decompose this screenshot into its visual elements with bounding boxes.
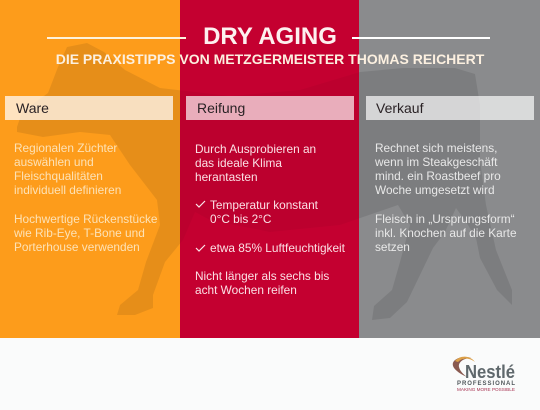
heading bar: Reifung: Reifung — [197, 100, 245, 116]
panel: Reifung background — [180, 0, 359, 338]
text: temperature: 0°C bis 2°C — [210, 212, 271, 226]
text: Reifung tip 1 — [195, 142, 316, 184]
text: humidity: etwa 85% Luftfeuchtigkeit — [210, 241, 345, 255]
title rule right — [352, 37, 490, 39]
text: temperature — [210, 198, 318, 226]
logo subtitle: PROFESSIONAL — [457, 381, 515, 387]
text: Ware tip 2: wie Rib-Eye, T-Bone und — [14, 226, 145, 240]
panel: Verkauf background — [359, 0, 540, 338]
text: Reifung tip 2: acht Wochen reifen — [195, 283, 297, 297]
text: Verkauf tip 1: Rechnet sich meistens, — [375, 141, 497, 155]
text: Ware tip 1: Regionalen Züchter — [14, 141, 117, 155]
panel: Ware background — [0, 0, 180, 338]
text: Verkauf tip 2 — [375, 212, 517, 254]
text: temperature: Temperatur konstant — [210, 198, 318, 212]
text: Ware tip 1: Fleischqualitäten — [14, 169, 103, 183]
logo tagline: MAKING MORE POSSIBLE — [457, 387, 515, 392]
icon: logo arc — [453, 357, 475, 377]
text: Reifung tip 2: Nicht länger als sechs bis — [195, 269, 329, 283]
icon: check mark temperature — [196, 200, 206, 208]
text: Reifung tip 2 — [195, 269, 329, 297]
text: Verkauf tip 1: Woche umgesetzt wird — [375, 183, 495, 197]
title: DRY AGING — [203, 23, 337, 50]
text: Ware tip 2 — [14, 212, 158, 254]
text: Reifung tip 1: herantasten — [195, 170, 258, 184]
title rule left — [47, 37, 186, 39]
logo: Nestlé Professional — [452, 356, 515, 392]
text: Ware tip 1: auswählen und — [14, 155, 94, 169]
heading bar: Verkauf: Verkauf — [376, 100, 423, 116]
text: Verkauf tip 2: setzen — [375, 240, 410, 254]
text: Ware tip 2: Hochwertige Rückenstücke — [14, 212, 158, 226]
text: Reifung tip 1: das ideale Klima — [195, 156, 282, 170]
subtitle: DIE PRAXISTIPPS VON METZGERMEISTER THOMAS REICHERT — [56, 51, 484, 67]
heading bar: Ware — [5, 96, 173, 120]
text: Ware tip 2: Porterhouse verwenden — [14, 240, 140, 254]
icon: check mark humidity — [196, 244, 206, 252]
text: Ware tip 1: individuell definieren — [14, 183, 121, 197]
heading bar: Ware: Ware — [16, 100, 49, 116]
text: Reifung tip 1: Durch Ausprobieren an — [195, 142, 316, 156]
text: Ware tip 1 — [14, 141, 121, 197]
heading bar: Verkauf — [366, 96, 534, 120]
text: Verkauf tip 1 — [375, 141, 501, 197]
heading bar: Reifung — [186, 96, 354, 120]
title block — [47, 23, 490, 67]
text: Verkauf tip 2: Fleisch in „Ursprungsform“ — [375, 212, 515, 226]
text: Verkauf tip 2: inkl. Knochen auf die Karte — [375, 226, 517, 240]
text: Verkauf tip 1: mind. ein Roastbeef pro — [375, 169, 501, 183]
logo wordmark: Nestlé — [465, 362, 515, 382]
text: Verkauf tip 1: wenn im Steakgeschäft — [375, 155, 497, 169]
